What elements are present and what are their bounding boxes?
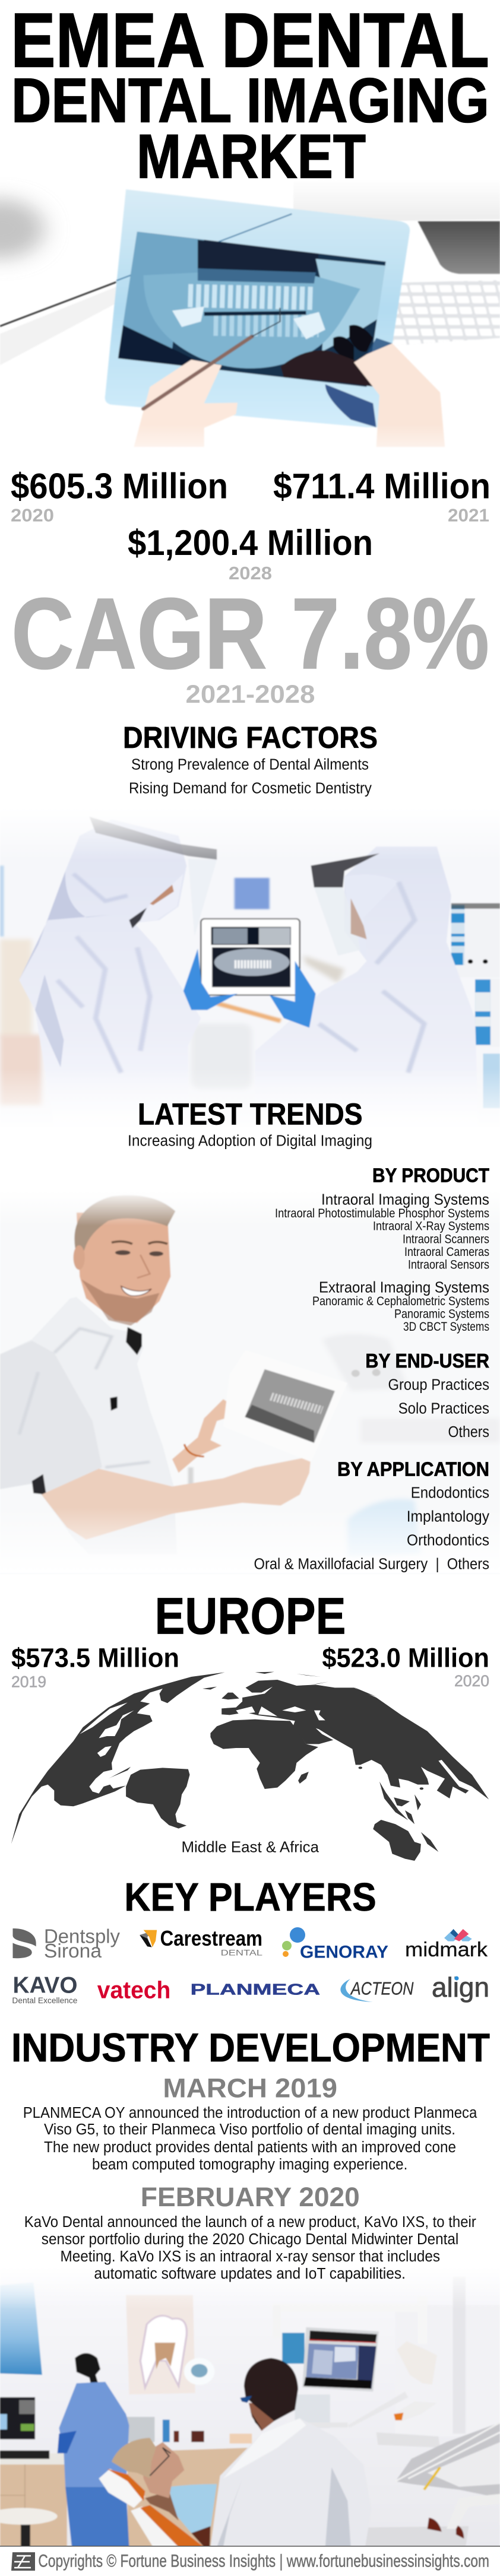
development: February 2020: KaVo Dental announced the launch of a new product, KaVo IXS, to their [24, 2214, 476, 2231]
logo: Dentsply Sirona: Sirona [44, 1940, 102, 1962]
segmentation: by end-user: Group Practices [388, 1376, 489, 1393]
segmentation: by end-user: BY END-USER [365, 1350, 489, 1372]
logo: Acteon [340, 1978, 414, 2002]
segmentation: by application: Oral & Maxillofacial Surgery | Others [254, 1556, 489, 1573]
logo: Genoray [282, 1927, 388, 1962]
photo: dentist reviewing panoramic x-ray [0, 189, 500, 447]
segmentation: by product: Extraoral Imaging Systems [319, 1278, 489, 1296]
logo: Carestream Dental [140, 1926, 262, 1957]
logo: Planmeca: PLANMECA [191, 1981, 320, 1998]
logo: Dentsply Sirona [12, 1925, 120, 1962]
development: February 2020: Meeting. KaVo IXS is an intraoral x-ray sensor that includes [61, 2248, 440, 2265]
logo: Midmark: midmark [405, 1939, 488, 1961]
driving factors: Rising Demand for Cosmetic Dentistry [129, 781, 372, 797]
development: February 2020: automatic software updates and IoT capabilities. [94, 2266, 406, 2282]
logo: KaVo: KAVO [13, 1972, 77, 1998]
Europe value 2019: 2019 [11, 1673, 46, 1690]
region label: Middle East & Africa [182, 1838, 319, 1856]
photo: dental clinic with dentist, nurse and patient [0, 2264, 500, 2547]
segmentation: by application: BY APPLICATION [337, 1458, 489, 1480]
logo: Carestream Dental: DENTAL [221, 1947, 262, 1957]
logo: Dentsply Sirona: Dentsply [44, 1925, 120, 1947]
development: March 2019: Viso G5, to their Planmeca Viso portfolio of dental imaging units. [44, 2121, 455, 2138]
logo: Acteon: ACTEON [350, 1978, 414, 1999]
key players heading: KEY PLAYERS [124, 1875, 376, 1920]
icon: Fortune Business Insights logo [11, 2552, 35, 2571]
segmentation: by end-user [365, 1350, 489, 1441]
driving factors [123, 721, 378, 797]
title [11, 0, 489, 191]
segmentation: by product: BY PRODUCT [372, 1164, 489, 1186]
market value 2020: $605.3 Million [11, 467, 228, 506]
Europe value 2020: $523.0 Million [322, 1642, 489, 1673]
Europe value 2020: 2020 [454, 1672, 489, 1690]
market value 2020 [11, 467, 228, 526]
market value 2021: 2021 [448, 505, 489, 526]
title: MARKET [137, 122, 366, 191]
market value 2028: $1,200.4 Million [128, 523, 373, 563]
development: March 2019: MARCH 2019 [163, 2073, 337, 2103]
segmentation: by application: Orthodontics [407, 1533, 489, 1549]
segmentation: by end-user: Solo Practices [398, 1400, 489, 1417]
segmentation: by application: Implantology [407, 1509, 489, 1525]
logo: Genoray: GENORAY [300, 1942, 388, 1962]
logo: Carestream Dental: Carestream [160, 1926, 262, 1950]
latest trends: Increasing Adoption of Digital Imaging [128, 1132, 372, 1149]
development: February 2020 [24, 2182, 476, 2282]
footer bar [0, 2546, 500, 2576]
driving factors: Strong Prevalence of Dental Ailments [131, 757, 369, 773]
Europe value 2020 [322, 1642, 489, 1690]
logo: Vatech: vatech [97, 1977, 170, 2004]
development: March 2019 [23, 2073, 477, 2173]
development: March 2019: beam computed tomography imaging experience. [92, 2156, 407, 2173]
Europe value 2019 [11, 1642, 179, 1690]
development: March 2019: PLANMECA OY announced the introduction of a new product Planmeca [23, 2105, 477, 2121]
photo: smiling dentist holding x-ray sheet [0, 1190, 500, 1573]
market value 2021: $711.4 Million [273, 467, 490, 506]
logo: KaVo: Dental Excellence [12, 1996, 77, 2005]
region heading: Europe: EUROPE [154, 1587, 346, 1645]
segmentation: by end-user: Others [448, 1424, 489, 1441]
latest trends [128, 1097, 372, 1149]
segmentation: by application: Endodontics [411, 1485, 489, 1502]
market value 2020: 2020 [11, 505, 54, 526]
driving factors: DRIVING FACTORS [123, 721, 378, 754]
development: February 2020: sensor portfolio during the 2020 Chicago Dental Midwinter Dental [42, 2231, 458, 2248]
market value 2028 [128, 523, 373, 583]
Europe value 2019: $573.5 Million [11, 1642, 179, 1673]
development: March 2019: The new product provides dental patients with an improved cone [44, 2139, 456, 2156]
photo: two clinicians in protective suits reading a tablet x-ray [0, 807, 500, 1134]
segmentation: by product: Intraoral Imaging Systems [321, 1191, 489, 1208]
segmentation: by product [275, 1164, 489, 1334]
world map globe [11, 1672, 489, 1861]
segmentation: by application [254, 1458, 489, 1573]
CAGR figure: 2021-2028 [185, 680, 315, 709]
development: February 2020: FEBRUARY 2020 [141, 2182, 360, 2212]
logo: Align: align [432, 1972, 489, 2003]
latest trends: LATEST TRENDS [138, 1097, 362, 1131]
market value 2021 [273, 467, 490, 526]
logo: Midmark [405, 1929, 488, 1961]
market value 2028: 2028 [229, 563, 272, 583]
